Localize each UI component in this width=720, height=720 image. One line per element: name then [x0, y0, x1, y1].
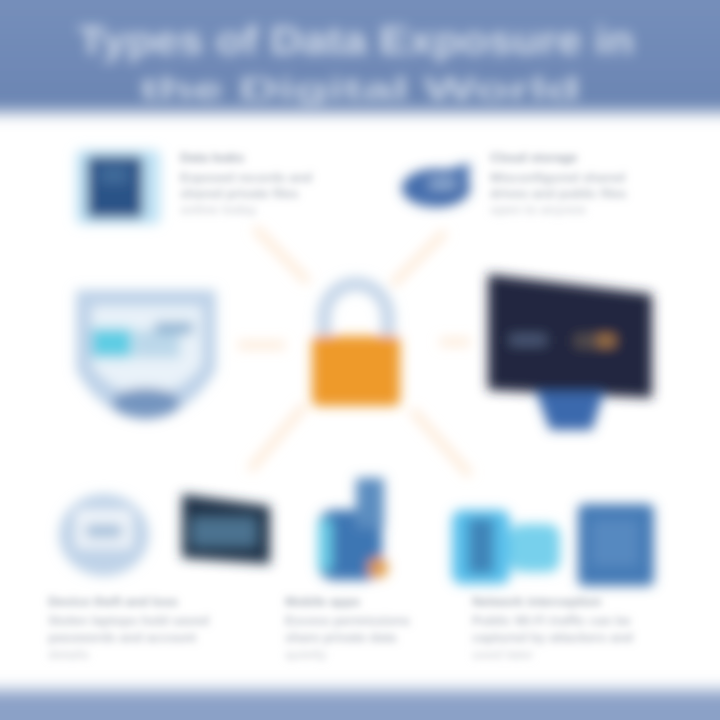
text block: bottom left: Device theft and loss	[48, 594, 178, 609]
text block: bottom centre: quietly	[285, 647, 328, 662]
icon: bottom right screens	[452, 504, 654, 586]
text block: top left	[180, 150, 312, 217]
text block: top right: Misconfigured shared	[490, 170, 625, 185]
icon: top right cloud	[402, 163, 470, 207]
icon: bottom left round device	[59, 494, 149, 576]
icon: left shield with screen	[76, 290, 216, 420]
footer bar	[0, 690, 720, 720]
icon: bottom left dark tablet	[182, 494, 270, 564]
text block: bottom left: details	[48, 647, 89, 662]
text block: top left: online today	[180, 202, 257, 217]
title: Types of Data Exposure in	[78, 19, 634, 63]
text block: top right: open to anyone	[490, 202, 586, 217]
text block: bottom centre: Mobile apps	[285, 594, 360, 609]
text block: top left: shared private files	[180, 186, 298, 201]
icon: bottom centre phone	[318, 478, 388, 580]
text block: top left: Exposed records and	[180, 170, 312, 185]
text block: bottom centre	[285, 594, 410, 662]
text block: bottom left	[48, 594, 209, 662]
text block: bottom centre: Excess permissions	[285, 613, 410, 628]
icon: central padlock	[312, 284, 400, 406]
icon: top left document	[76, 150, 160, 224]
text block: top right	[490, 150, 627, 217]
text block: bottom centre: share private data	[285, 630, 397, 645]
text block: bottom right: Public Wi-Fi traffic can be	[472, 613, 631, 628]
text block: bottom right: Network interception	[472, 594, 601, 609]
text block: top left: Data leaks	[180, 150, 244, 165]
text block: bottom left: passwords and account	[48, 630, 197, 645]
text block: bottom right: used later	[472, 647, 533, 662]
text block: top right: drives and public files	[490, 186, 627, 201]
header banner	[0, 0, 720, 112]
text block: bottom right: captured by attackers and	[472, 630, 633, 645]
title: the Digital World	[140, 71, 580, 107]
icon: right dark monitor	[488, 274, 652, 430]
text block: bottom left: Stolen laptops hold saved	[48, 613, 209, 628]
title	[78, 19, 634, 107]
text block: top right: Cloud storage	[490, 150, 577, 165]
connector lines	[238, 228, 470, 475]
text block: bottom right	[472, 594, 633, 662]
